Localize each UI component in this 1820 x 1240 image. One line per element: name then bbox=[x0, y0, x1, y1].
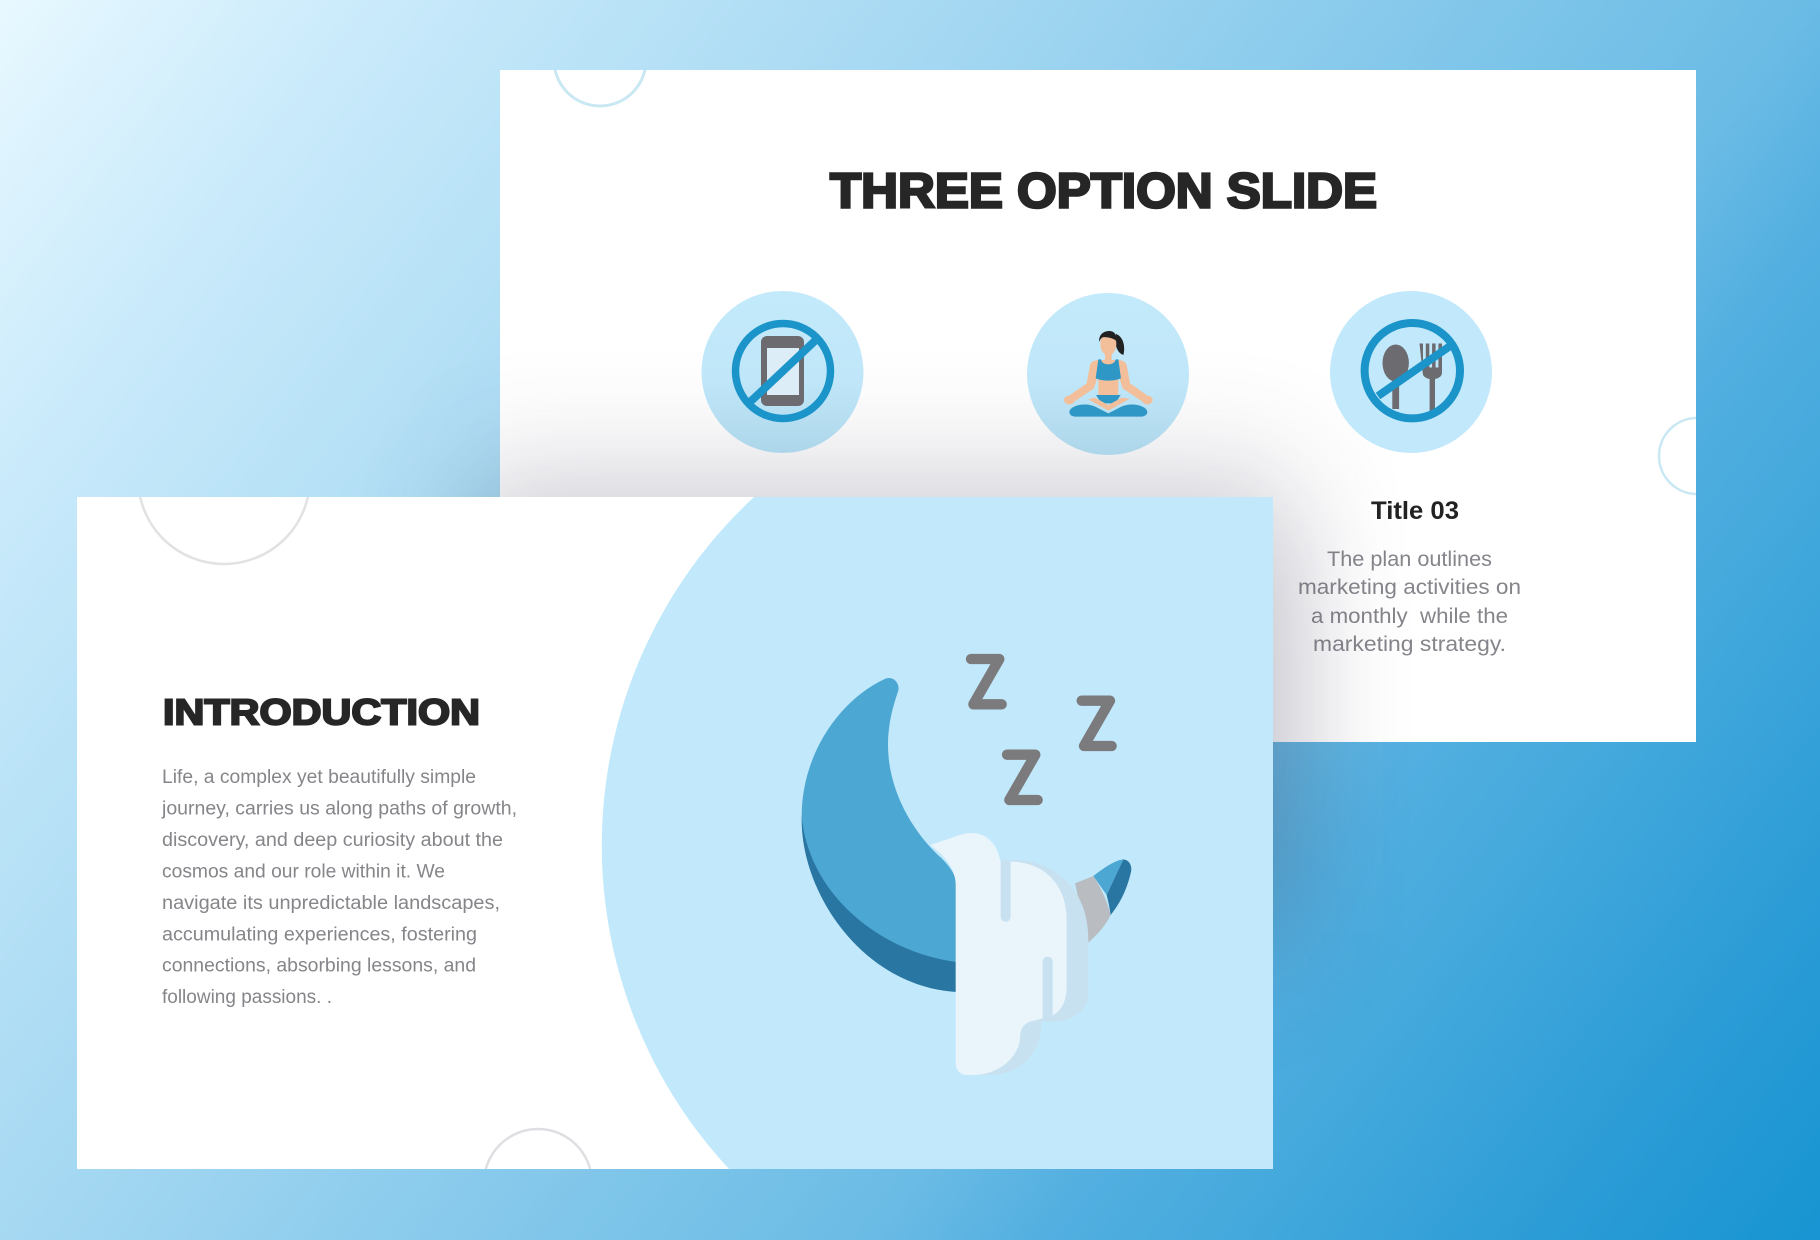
introduction body text: Life, a complex yet beautifully simple bbox=[162, 767, 476, 788]
illustration: crescent moon with cloud and z's bbox=[802, 659, 1131, 1075]
moon dark edge bbox=[802, 787, 957, 992]
panel: introduction slide bbox=[77, 497, 1273, 1169]
introduction body text: following passions. . bbox=[162, 987, 332, 1008]
icon: no phone bbox=[702, 291, 864, 453]
cloud front layer bbox=[930, 833, 1067, 1075]
moon right tip bbox=[1075, 859, 1131, 943]
introduction body text: discovery, and deep curiosity about the bbox=[162, 830, 503, 851]
option 03 description: marketing strategy. bbox=[1313, 633, 1506, 656]
introduction body text: accumulating experiences, fostering bbox=[162, 924, 477, 946]
decorative circle right bbox=[1658, 416, 1696, 496]
icon: meditation figure bbox=[1027, 293, 1189, 455]
option 03 description bbox=[1298, 548, 1521, 656]
shadow cast by front slide bbox=[465, 497, 1295, 932]
option 03 description: marketing activities on bbox=[1298, 576, 1521, 599]
introduction body text bbox=[161, 767, 517, 1008]
icon: no food bbox=[1330, 291, 1492, 453]
panel: three option slide bbox=[500, 70, 1696, 742]
decorative circle top bbox=[554, 70, 646, 108]
option 03 description: a monthly while the bbox=[1311, 605, 1508, 628]
moon face bbox=[802, 678, 957, 962]
decorative circle top left bbox=[139, 497, 309, 566]
large pale blue circle bbox=[602, 497, 1273, 1169]
introduction body text: cosmos and our role within it. We bbox=[162, 862, 445, 882]
sleep z letters bbox=[971, 659, 1112, 800]
option 03 description: The plan outlines bbox=[1327, 548, 1492, 571]
cloud drip lines bbox=[1001, 860, 1053, 1019]
title 03: Title 03 bbox=[1371, 497, 1459, 525]
introduction body text: navigate its unpredictable landscapes, bbox=[162, 893, 500, 914]
decorative circle bottom bbox=[484, 1128, 592, 1169]
cloud shadow layer bbox=[973, 860, 1088, 1075]
heading: introduction: INTRODUCTION bbox=[163, 692, 480, 732]
introduction body text: connections, absorbing lessons, and bbox=[162, 956, 476, 976]
introduction body text: journey, carries us along paths of growth, bbox=[161, 798, 517, 820]
heading: three option slide: THREE OPTION SLIDE bbox=[830, 164, 1377, 218]
